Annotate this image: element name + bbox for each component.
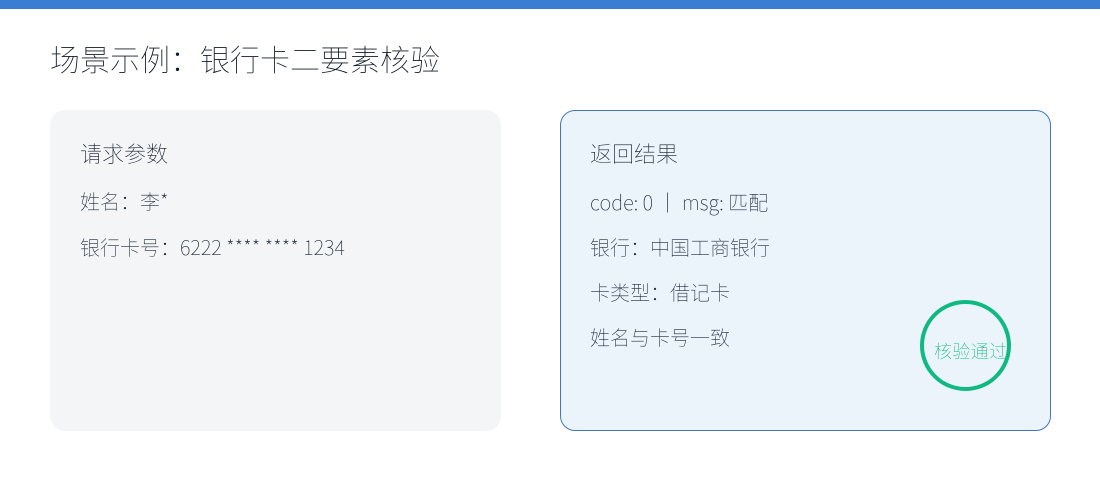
- title: 场景示例：银行卡二要素核验: [50, 36, 440, 80]
- panel heading: request parameters: 请求参数: [80, 137, 168, 169]
- top accent bar: [0, 0, 1100, 9]
- text: card number: 银行卡号：6222 **** **** 1234: [80, 232, 345, 261]
- stamp: verification passed: [920, 300, 1011, 391]
- text: match statement: 姓名与卡号一致: [590, 322, 730, 351]
- panel: request parameters: [50, 110, 501, 431]
- stamp text: 核验通过: [934, 338, 1008, 364]
- text: name: 姓名：李*: [80, 186, 169, 215]
- panel heading: response result: 返回结果: [590, 137, 678, 169]
- text: bank: 银行：中国工商银行: [590, 232, 770, 261]
- text: card type: 卡类型：借记卡: [590, 277, 730, 306]
- panel: response result: [560, 110, 1051, 431]
- text: code and message: code: 0 ｜ msg: 匹配: [590, 187, 768, 216]
